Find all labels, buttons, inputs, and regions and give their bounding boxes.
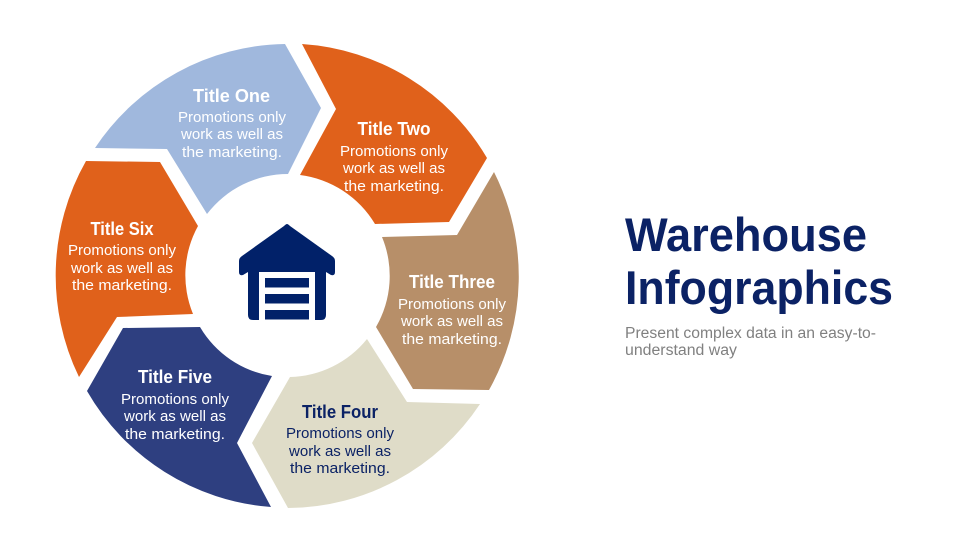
heading: title six: Title Six xyxy=(90,219,154,239)
text block: title four: Promotions only xyxy=(286,425,394,442)
heading: title four: Title Four xyxy=(302,402,378,422)
segment shape: title two xyxy=(300,44,487,224)
segment shape: title five xyxy=(87,327,272,507)
text block: title four xyxy=(286,425,394,477)
title: Warehouse xyxy=(625,208,867,261)
heading: title two: Title Two xyxy=(358,119,430,139)
panel: title three xyxy=(376,172,519,390)
text block: title three: Promotions only xyxy=(398,296,506,313)
text block: title one: work as well as xyxy=(180,126,283,143)
heading: title five: Title Five xyxy=(138,367,212,387)
text block: title six xyxy=(68,242,176,294)
heading: title three: Title Three xyxy=(409,272,495,292)
text block: title two xyxy=(340,143,448,195)
text block: title three: work as well as xyxy=(400,313,503,330)
title: Infographics xyxy=(625,261,893,314)
text block: title four: the marketing. xyxy=(290,460,390,477)
text block: title six: the marketing. xyxy=(72,277,172,294)
panel: title two xyxy=(300,44,487,224)
subtitle text block xyxy=(625,325,876,359)
panel: title four xyxy=(252,339,480,508)
text block: title one xyxy=(178,109,286,161)
segment shape: title one xyxy=(95,44,321,214)
subtitle text block: understand way xyxy=(625,342,737,359)
segment shape: title three xyxy=(376,172,519,390)
text block: title two: the marketing. xyxy=(344,178,444,195)
title xyxy=(625,208,893,314)
text block: title four: work as well as xyxy=(288,443,391,460)
text block: title two: work as well as xyxy=(342,160,445,177)
text block: title five: work as well as xyxy=(123,408,226,425)
text block: title one: the marketing. xyxy=(182,144,282,161)
text block: title six: work as well as xyxy=(70,260,173,277)
heading: title one: Title One xyxy=(193,86,270,106)
panel: title one xyxy=(95,44,321,214)
text block: title five: the marketing. xyxy=(125,426,225,443)
segment shape: title six xyxy=(56,161,198,377)
text block: title six: Promotions only xyxy=(68,242,176,259)
panel: title five xyxy=(87,327,272,507)
text block: title two: Promotions only xyxy=(340,143,448,160)
panel: title six xyxy=(56,161,198,377)
text block: title one: Promotions only xyxy=(178,109,286,126)
subtitle text block: Present complex data in an easy-to- xyxy=(625,325,876,342)
icon: warehouse xyxy=(239,224,335,320)
segment shape: title four xyxy=(252,339,480,508)
text block: title three: the marketing. xyxy=(402,331,502,348)
text block: title five: Promotions only xyxy=(121,391,229,408)
text block: title five xyxy=(121,391,229,443)
text block: title three xyxy=(398,296,506,348)
